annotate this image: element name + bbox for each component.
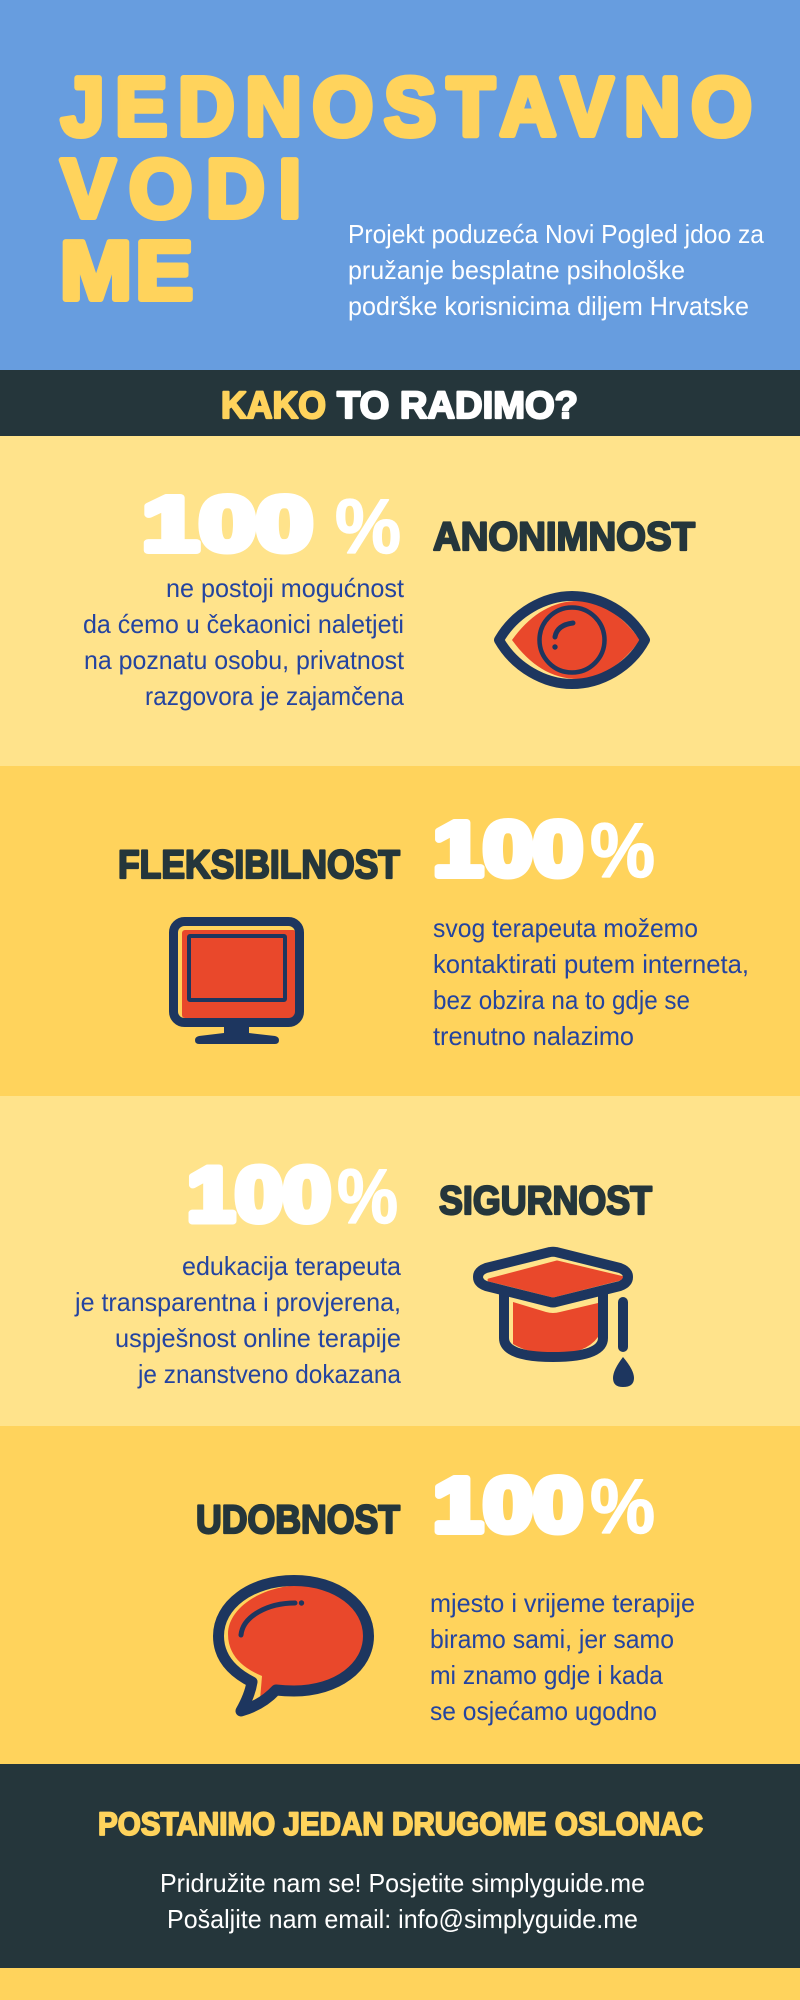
contact text: Pridružite nam se! Posjetite simplyguide.me <box>160 1868 645 1898</box>
description: sigurnost: je transparentna i provjerena, <box>74 1287 401 1317</box>
description: udobnost: biramo sami, jer samo <box>430 1624 674 1654</box>
description: udobnost: mjesto i vrijeme terapije <box>430 1588 695 1618</box>
description: anonimnost: ne postoji mogućnost <box>166 573 405 603</box>
stat: 100 %: 100 <box>142 482 313 568</box>
heading: udobnost: UDOBNOST <box>196 1498 400 1542</box>
title: VODI <box>61 143 301 235</box>
intro text <box>348 219 765 321</box>
stat: 100%: % <box>590 1464 655 1550</box>
description: udobnost: se osjećamo ugodno <box>430 1696 657 1726</box>
intro text: podrške korisnicima diljem Hrvatske <box>348 291 749 321</box>
icon: speech bubble <box>218 1580 369 1711</box>
heading: kako to radimo: TO RADIMO? <box>337 385 578 427</box>
stat: 100%: 100 <box>187 1152 331 1238</box>
stat: 100%: 100 <box>433 1462 583 1548</box>
panel: header <box>0 0 800 370</box>
description: anonimnost <box>83 573 405 711</box>
stat: 100% <box>433 1462 655 1550</box>
stat: 100%: % <box>590 808 655 894</box>
title: ME <box>60 224 193 317</box>
description: anonimnost: da ćemo u čekaonici naletjeti <box>83 609 404 639</box>
description: sigurnost: je znanstveno dokazana <box>137 1359 401 1389</box>
stat: 100 % <box>142 482 401 570</box>
panel: section heading band <box>0 370 800 436</box>
title <box>60 61 752 317</box>
description: anonimnost: na poznatu osobu, privatnost <box>84 645 405 675</box>
heading: anonimnost: ANONIMNOST <box>433 515 695 559</box>
description: udobnost <box>430 1588 695 1726</box>
panel: footer <box>0 1764 800 1968</box>
intro text: Projekt poduzeća Novi Pogled jdoo za <box>348 219 765 249</box>
description: fleksibilnost: kontaktirati putem interneta, <box>433 949 749 979</box>
icon: graduation cap <box>478 1252 634 1387</box>
panel: anonimnost <box>0 436 800 766</box>
panel: udobnost <box>0 1426 800 1764</box>
description: sigurnost: edukacija terapeuta <box>182 1251 402 1281</box>
panel: sigurnost <box>0 1096 800 1426</box>
icon: monitor <box>174 922 300 1044</box>
contact text <box>160 1868 645 1934</box>
panel: fleksibilnost <box>0 766 800 1096</box>
description: anonimnost: razgovora je zajamčena <box>145 681 404 711</box>
heading: kako to radimo <box>221 385 578 427</box>
heading: sigurnost: SIGURNOST <box>439 1179 652 1223</box>
stat: 100 %: % <box>335 484 401 570</box>
description: udobnost: mi znamo gdje i kada <box>430 1660 664 1690</box>
intro text: pružanje besplatne psihološke <box>348 255 685 285</box>
icon: eye <box>499 596 645 684</box>
description: fleksibilnost: svog terapeuta možemo <box>433 913 698 943</box>
description: fleksibilnost: bez obzira na to gdje se <box>433 985 690 1015</box>
heading: fleksibilnost: FLEKSIBILNOST <box>118 843 400 887</box>
stat: 100% <box>433 806 655 894</box>
heading: kako to radimo: KAKO <box>221 385 326 427</box>
stat: 100%: 100 <box>433 806 583 892</box>
stat: 100% <box>187 1152 398 1240</box>
title: JEDNOSTAVNO <box>61 61 752 154</box>
description: sigurnost: uspješnost online terapije <box>115 1323 401 1353</box>
description: fleksibilnost: trenutno nalazimo <box>433 1021 634 1051</box>
stat: 100%: % <box>337 1154 398 1240</box>
description: sigurnost <box>74 1251 402 1389</box>
contact text: Pošaljite nam email: info@simplyguide.me <box>167 1904 638 1934</box>
heading: call to action: POSTANIMO JEDAN DRUGOME OSLONAC <box>98 1806 703 1842</box>
description: fleksibilnost <box>433 913 749 1051</box>
